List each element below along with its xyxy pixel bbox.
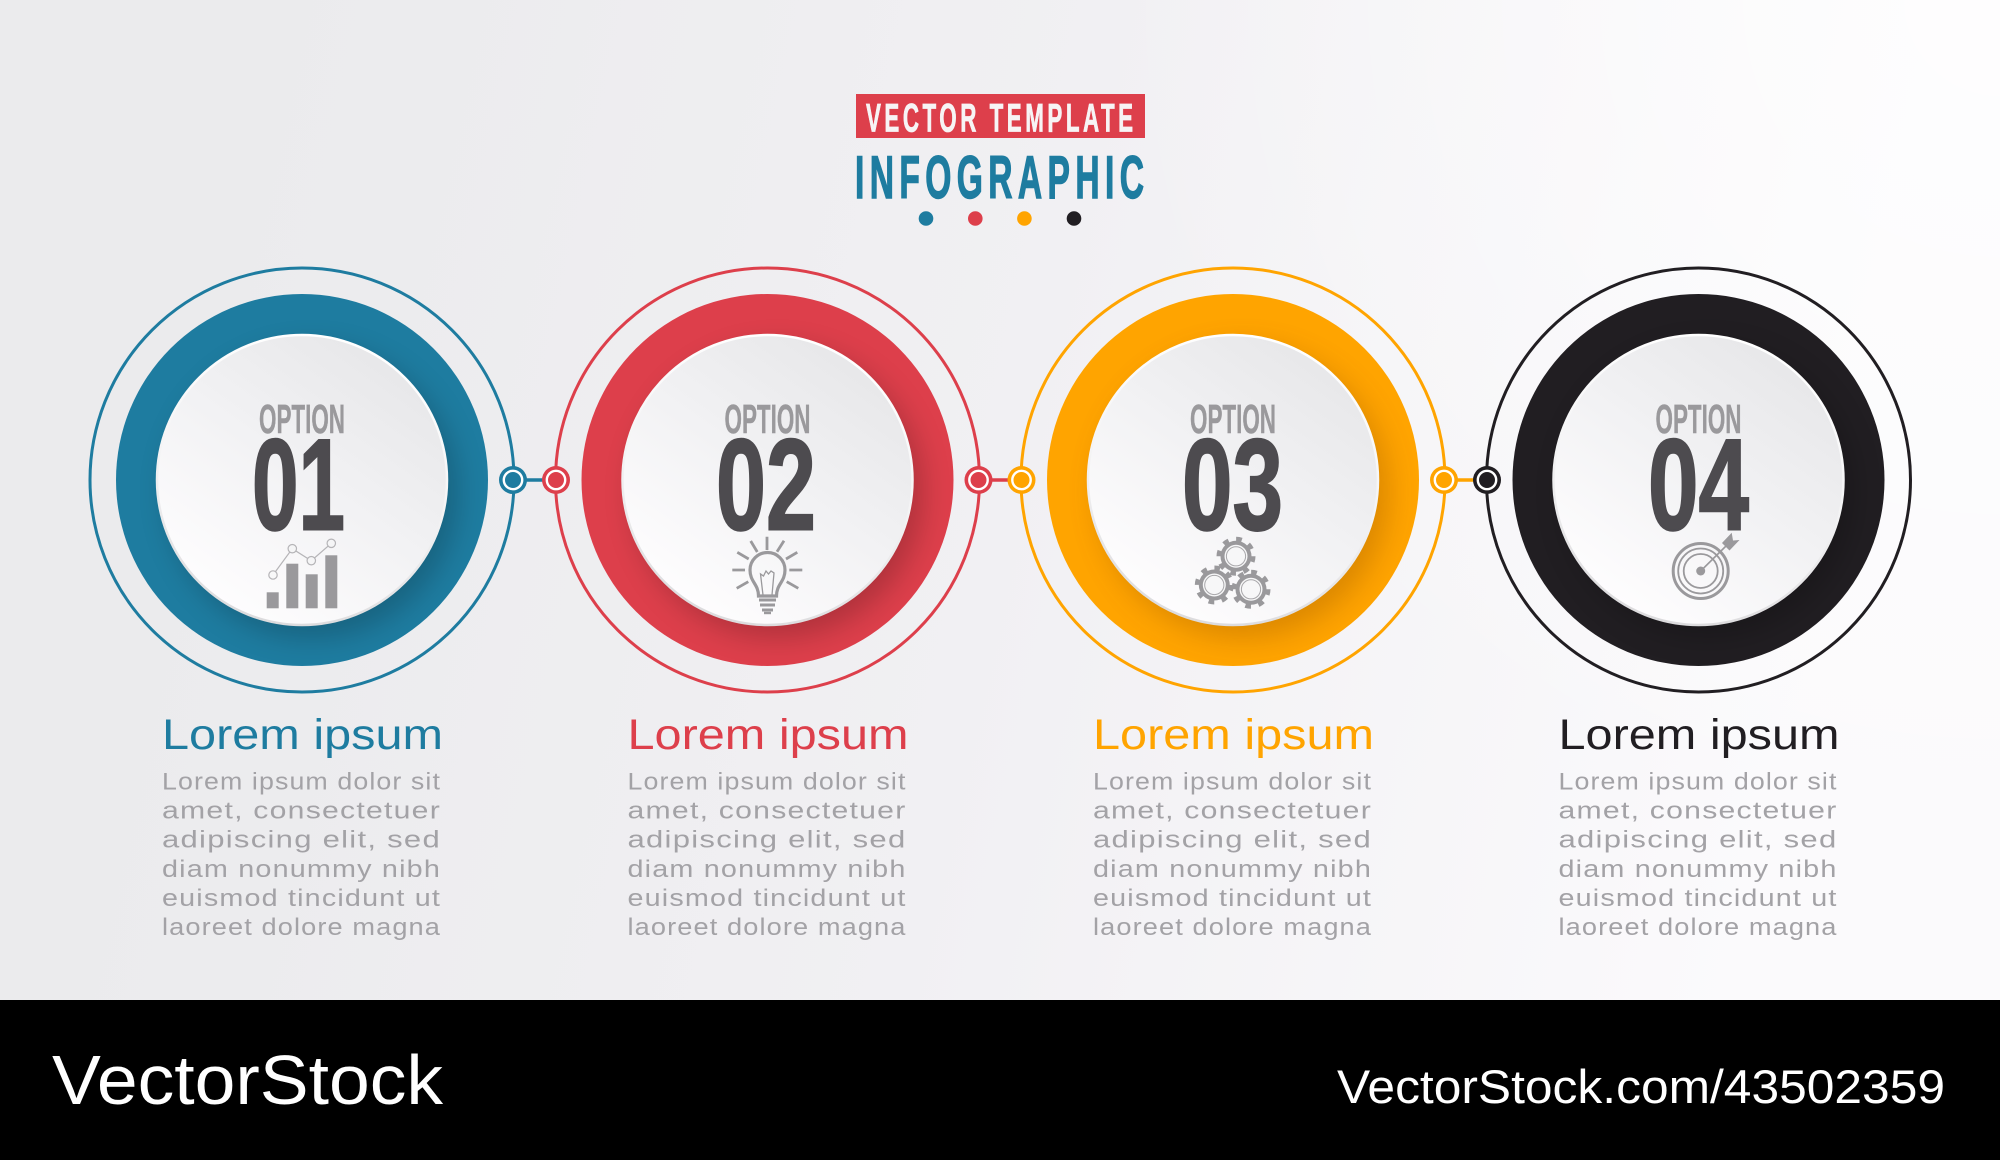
icon: gears: [1198, 540, 1268, 606]
panel: option 03: [1021, 268, 1445, 941]
coloured ring 01: [116, 294, 488, 666]
coloured ring 03: [1047, 294, 1419, 666]
body text 03: adipiscing elit, sed: [1093, 827, 1372, 854]
disc 01: [157, 335, 447, 625]
panel: option 02: [556, 268, 980, 941]
label option 02: OPTION: [724, 396, 810, 442]
icon: bar chart: [267, 539, 337, 608]
disc 02: [622, 335, 912, 625]
title block: [855, 94, 1145, 226]
banner: vector template: VECTOR TEMPLATE: [866, 96, 1133, 140]
disc 04: [1554, 335, 1844, 625]
heading 03: Lorem ipsum: [1093, 711, 1374, 759]
outer ring 01: [90, 268, 514, 692]
body text 03: Lorem ipsum dolor sit: [1093, 768, 1372, 795]
connector: 03 to 04: [1430, 466, 1501, 494]
gear right: [1234, 573, 1268, 606]
body text 01: laoreet dolore magna: [162, 914, 441, 941]
body text 04: adipiscing elit, sed: [1558, 827, 1838, 854]
heading: infographic: INFOGRAPHIC: [855, 145, 1144, 212]
outer ring 03: [1021, 268, 1445, 692]
disc 03: [1088, 335, 1378, 625]
number 01: 01: [252, 412, 345, 558]
number 03: 03: [1182, 412, 1283, 558]
label option 03: OPTION: [1190, 396, 1276, 442]
label option 01: OPTION: [259, 396, 345, 442]
coloured ring 04: [1512, 294, 1884, 666]
body text 02: laoreet dolore magna: [628, 914, 906, 941]
body text 02: euismod tincidunt ut: [628, 885, 906, 912]
outer ring 02: [556, 268, 980, 692]
icon: light bulb: [732, 537, 802, 613]
body text 02: diam nonummy nibh: [628, 856, 906, 883]
heading 04: Lorem ipsum: [1558, 711, 1840, 759]
outer ring 04: [1486, 268, 1910, 692]
heading 02: Lorem ipsum: [628, 711, 908, 759]
body text 01: diam nonummy nibh: [162, 856, 441, 883]
coloured ring 02: [582, 294, 954, 666]
number 02: 02: [716, 412, 816, 558]
number 04: 04: [1648, 412, 1749, 558]
body text 03: amet, consectetuer: [1093, 798, 1372, 824]
body text 02: Lorem ipsum dolor sit: [628, 768, 906, 795]
body text 01: euismod tincidunt ut: [162, 885, 441, 912]
body text 01: amet, consectetuer: [162, 798, 441, 824]
footer url: VectorStock.com/43502359: [1337, 1060, 1945, 1113]
body text 01: Lorem ipsum dolor sit: [162, 768, 441, 795]
body text 03: [1093, 768, 1372, 941]
body text 04: amet, consectetuer: [1558, 798, 1838, 824]
body text 01: adipiscing elit, sed: [162, 827, 441, 854]
body text 04: laoreet dolore magna: [1558, 914, 1838, 941]
connector: 01 to 02: [499, 466, 570, 494]
body text 02: amet, consectetuer: [628, 798, 906, 824]
body text 01: [162, 768, 441, 941]
footer brand: VectorStock: [52, 1041, 444, 1119]
icon: target: [1673, 533, 1740, 598]
panel: option 04: [1486, 268, 1910, 941]
heading 01: Lorem ipsum: [162, 711, 443, 759]
body text 02: adipiscing elit, sed: [628, 827, 906, 854]
body text 02: [628, 768, 906, 941]
body text 04: Lorem ipsum dolor sit: [1558, 768, 1838, 795]
connector: 02 to 03: [964, 466, 1036, 494]
body text 04: diam nonummy nibh: [1558, 856, 1838, 883]
body text 03: euismod tincidunt ut: [1093, 885, 1372, 912]
label option 04: OPTION: [1656, 396, 1742, 442]
panel: option 01: [90, 268, 514, 941]
body text 04: [1558, 768, 1838, 941]
body text 03: laoreet dolore magna: [1093, 914, 1372, 941]
body text 03: diam nonummy nibh: [1093, 856, 1372, 883]
title colour dots: [919, 211, 1081, 226]
gear top: [1220, 540, 1252, 573]
body text 04: euismod tincidunt ut: [1558, 885, 1838, 912]
footer bar: [0, 1000, 2000, 1160]
gear left: [1198, 568, 1231, 602]
